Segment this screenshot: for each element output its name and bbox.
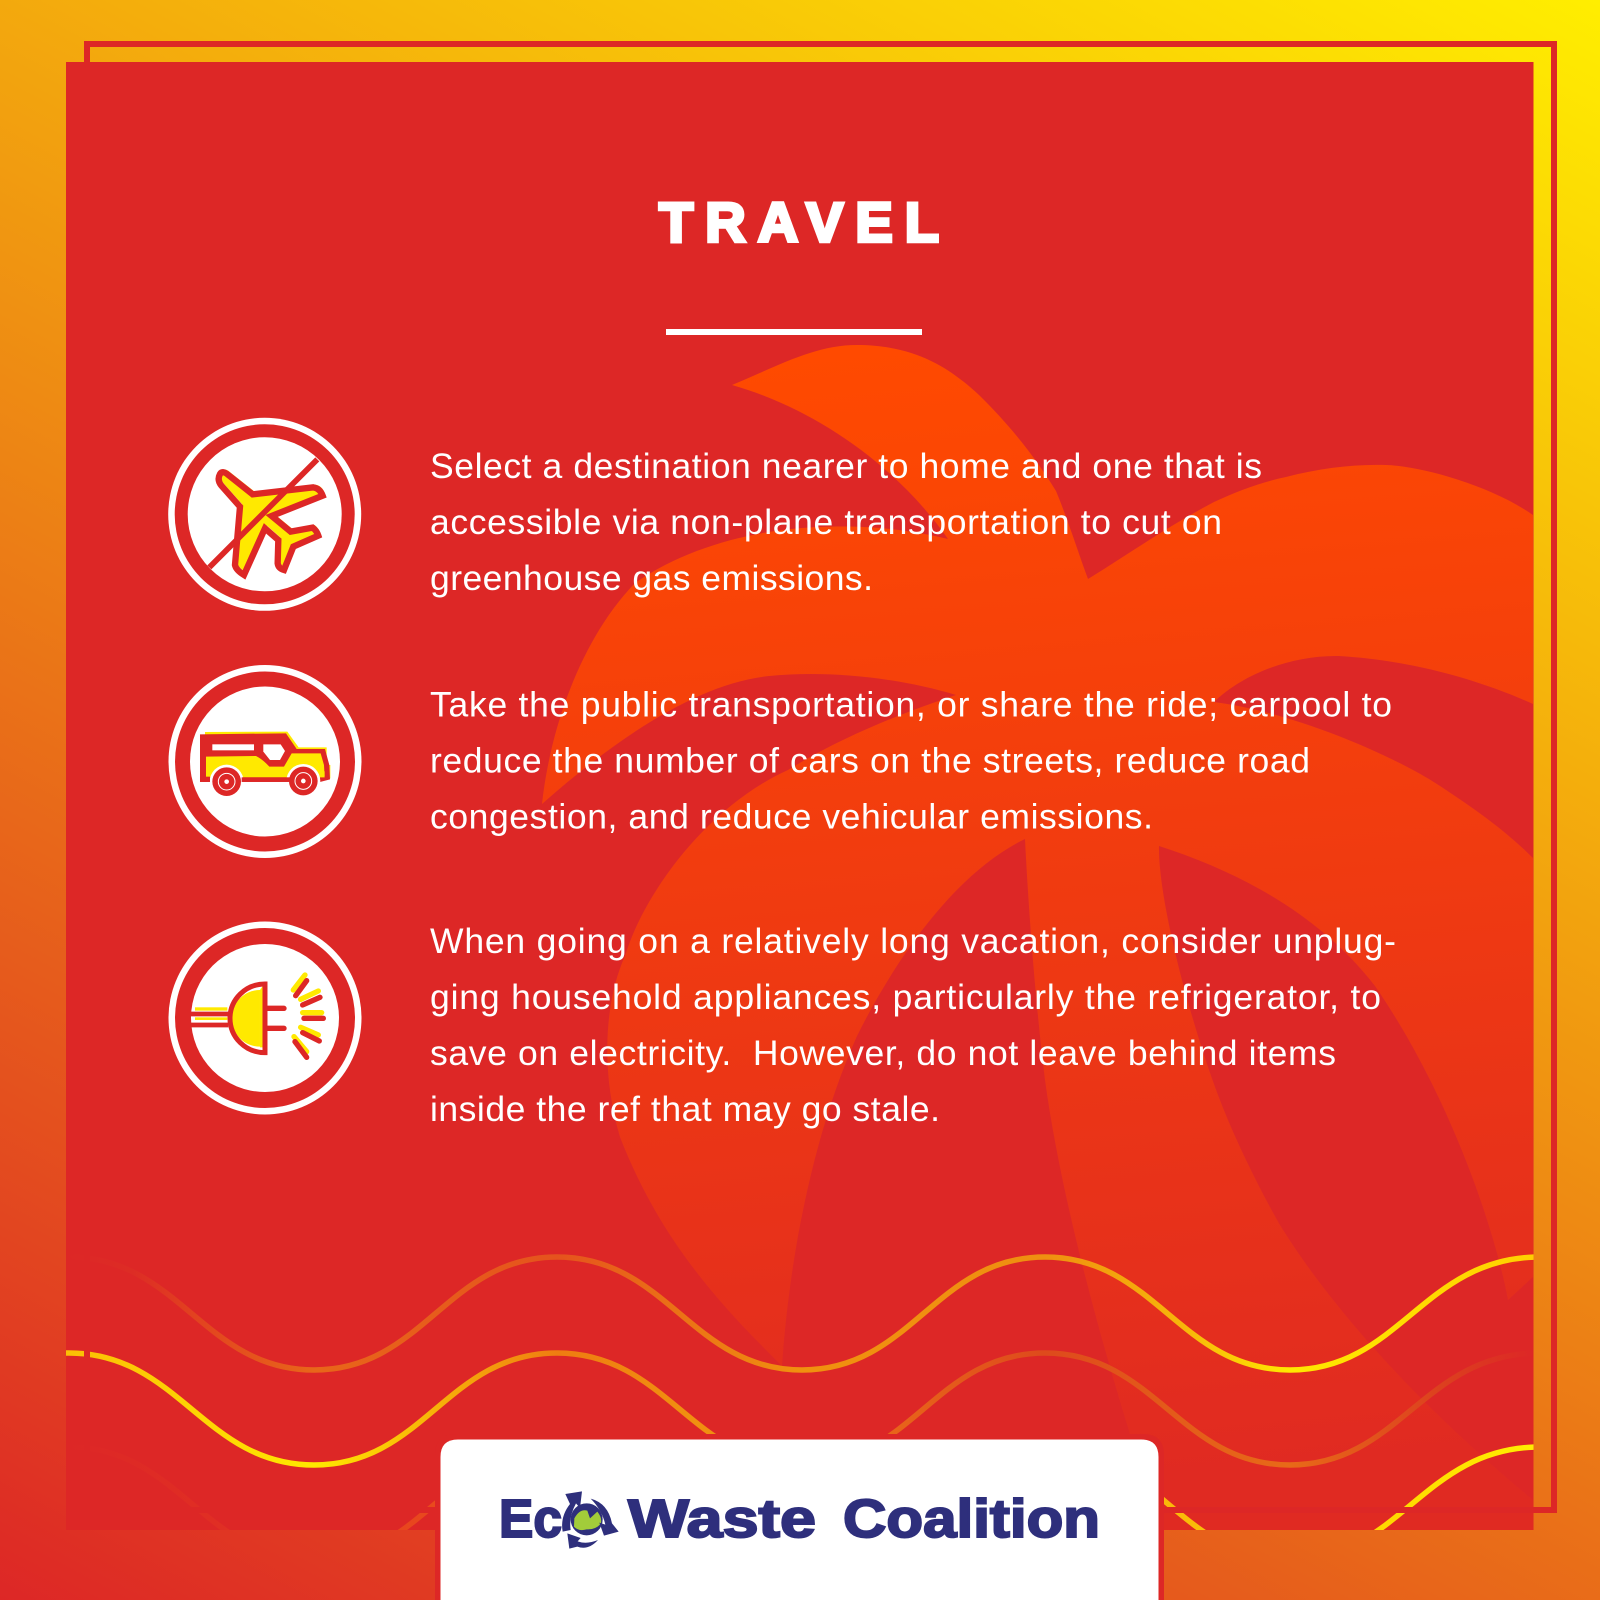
title: TRAVEL bbox=[659, 190, 939, 254]
text: public transport advice: Take the public transportation, or share the ride; carpool to bbox=[430, 684, 1392, 724]
text: unplug appliances advice: inside the ref that may go stale. bbox=[430, 1089, 940, 1129]
text: destination advice: greenhouse gas emissions. bbox=[430, 558, 873, 598]
logo: Eco Waste Coalition: Ec bbox=[499, 1489, 562, 1549]
text: destination advice: Select a destination nearer to home and one that is bbox=[430, 446, 1262, 486]
text: destination advice: accessible via non-plane transportation to cut on bbox=[430, 502, 1222, 542]
logo: Eco Waste Coalition: Coalition bbox=[843, 1489, 1100, 1549]
icon: jeep bbox=[168, 665, 362, 858]
text: destination advice bbox=[430, 446, 1262, 598]
logo: Eco Waste Coalition bbox=[499, 1489, 1100, 1549]
icon: no airplane bbox=[168, 418, 361, 611]
text: unplug appliances advice: save on electricity. However, do not leave behind items bbox=[430, 1033, 1336, 1073]
text: public transport advice: congestion, and reduce vehicular emissions. bbox=[430, 796, 1153, 836]
icon: unplugged plug bbox=[168, 922, 362, 1114]
title divider bbox=[666, 329, 922, 335]
palm tree silhouette bbox=[542, 345, 1533, 1365]
text: unplug appliances advice: When going on a relatively long vacation, consider unplug- bbox=[430, 921, 1396, 961]
text: public transport advice bbox=[430, 684, 1392, 836]
text: public transport advice: reduce the number of cars on the streets, reduce road bbox=[430, 740, 1310, 780]
text: unplug appliances advice: ging household appliances, particularly the refrigerator, to bbox=[430, 977, 1381, 1017]
logo: Eco Waste Coalition: Waste bbox=[628, 1489, 816, 1549]
decorative waves bbox=[66, 1254, 1534, 1530]
text: unplug appliances advice bbox=[430, 921, 1396, 1129]
logo card bbox=[435, 1434, 1164, 1600]
